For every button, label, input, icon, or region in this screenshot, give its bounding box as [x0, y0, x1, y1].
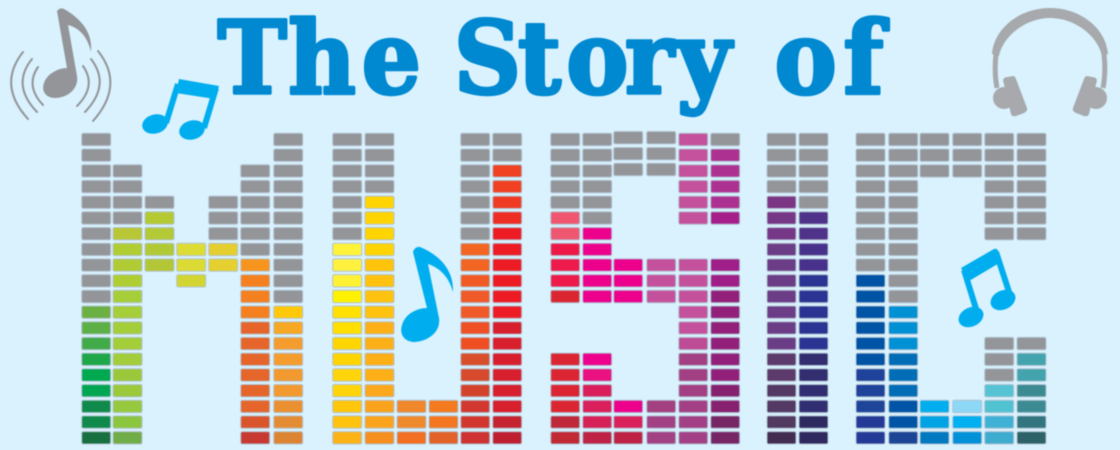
title: The Story of	[218, 0, 889, 117]
icon: blue beamed notes top left	[140, 79, 219, 143]
letter I equalizer	[767, 133, 828, 444]
icon: grey headphones	[992, 8, 1108, 116]
letter C equalizer	[856, 133, 1046, 444]
letter U equalizer	[333, 133, 522, 444]
letter S equalizer	[551, 132, 740, 444]
icon: blue beamed notes inside C	[955, 249, 1019, 331]
letter M equalizer	[82, 133, 303, 444]
icon: blue eighth note between U columns	[401, 247, 453, 342]
icon: grey music note with sound waves	[11, 8, 110, 121]
